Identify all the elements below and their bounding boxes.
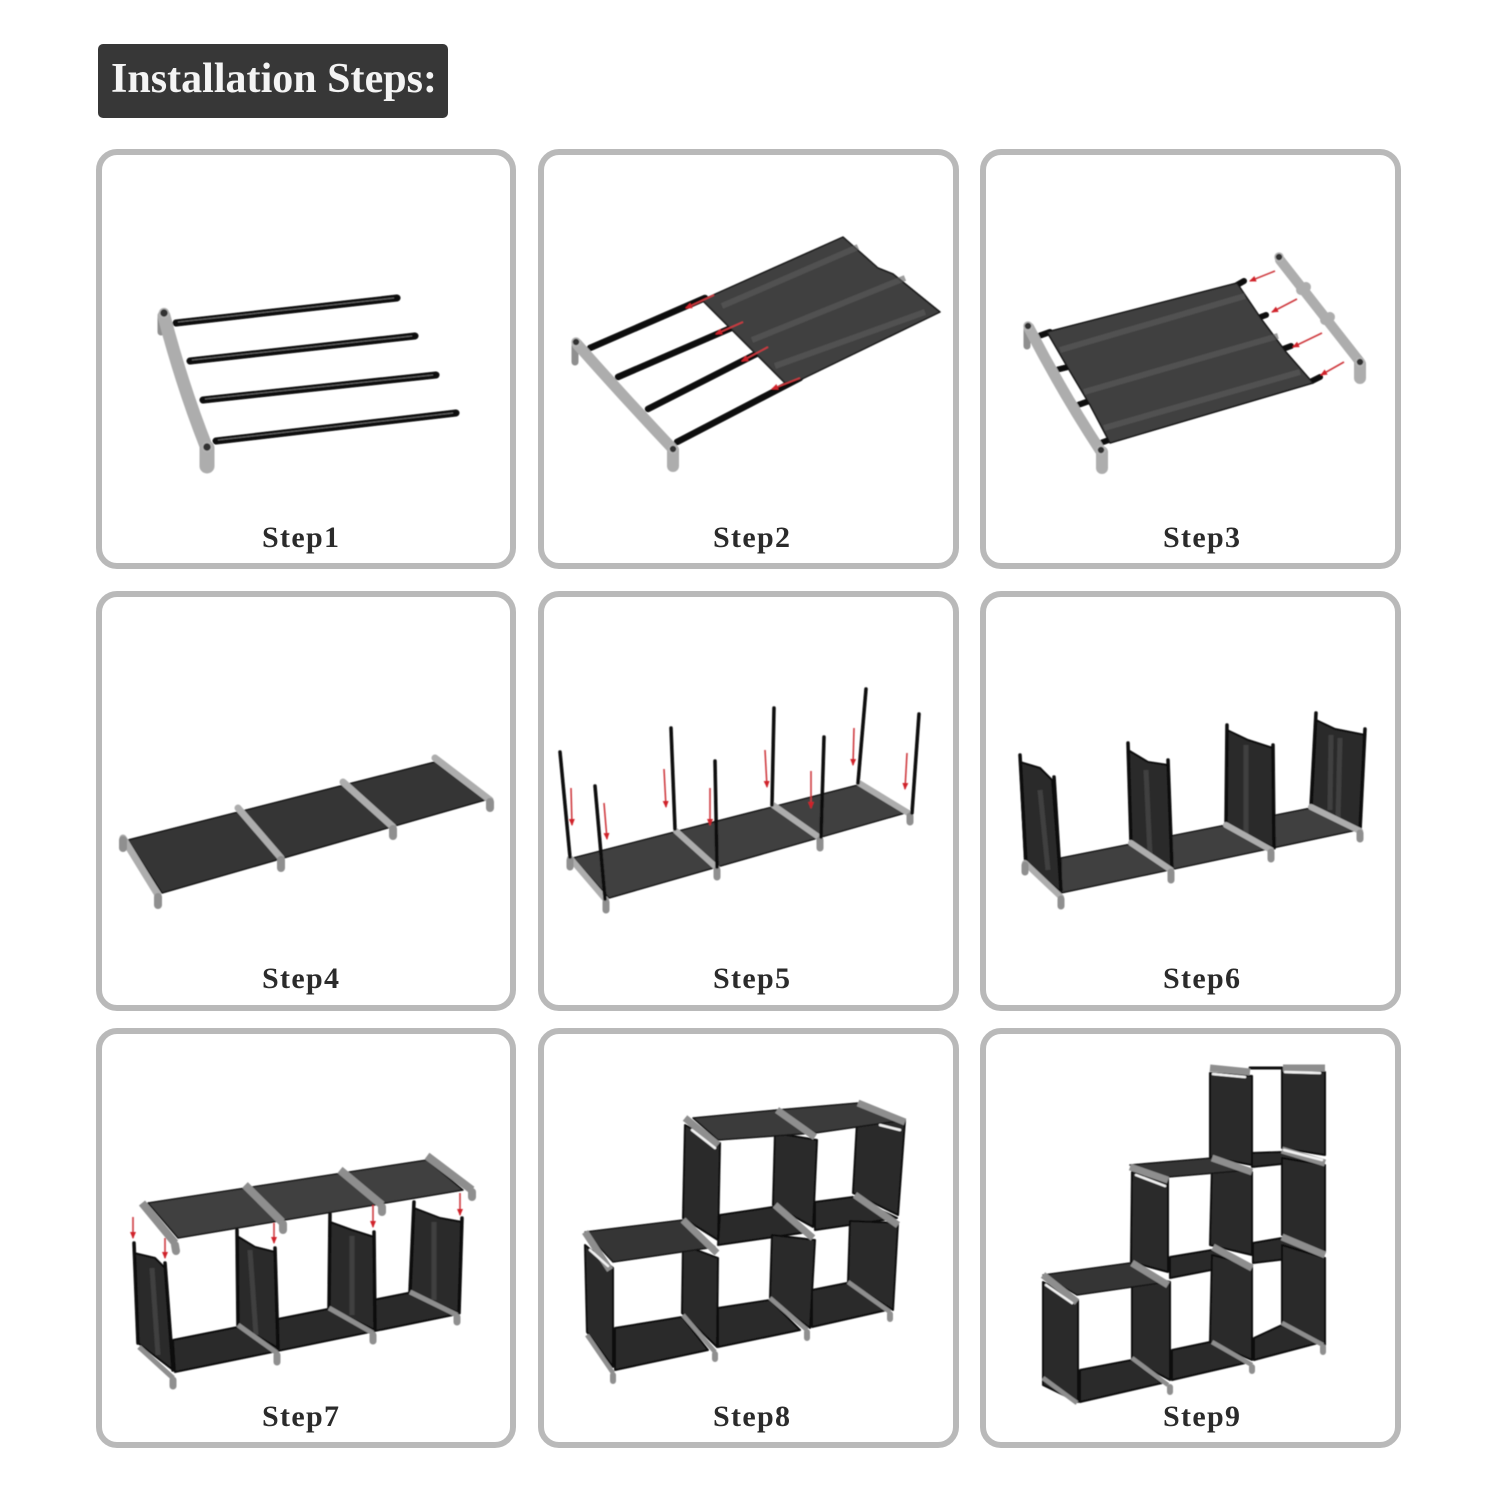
label: Step2: Step2 bbox=[713, 521, 790, 554]
panel: step 9 bbox=[983, 1031, 1398, 1445]
illustration: vertical poles inserted in base bbox=[560, 689, 919, 910]
label: Step1: Step1 bbox=[262, 521, 339, 554]
illustration: six-cube stepped shelf bbox=[585, 1103, 905, 1381]
panel: step 6 bbox=[983, 594, 1398, 1008]
title: Installation Steps bbox=[98, 44, 448, 118]
label: Step6: Step6 bbox=[1163, 962, 1240, 995]
illustration: six-cube staircase shelf bbox=[1043, 1068, 1325, 1403]
panel: step 2 bbox=[541, 152, 956, 566]
panel: step 7 bbox=[99, 1031, 513, 1445]
label: Step4: Step4 bbox=[262, 962, 339, 995]
illustration: side fabric panels fitted bbox=[1020, 713, 1365, 906]
panel: step 8 bbox=[541, 1031, 956, 1445]
panel: step 3 bbox=[983, 152, 1398, 566]
illustration: top shelf being lowered on panels bbox=[133, 1156, 472, 1386]
illustration: fabric sliding on rods bbox=[572, 237, 940, 466]
illustration: fabric on rods with second bar bbox=[1024, 253, 1364, 468]
label: Step5: Step5 bbox=[713, 962, 790, 995]
label: Step3: Step3 bbox=[1163, 521, 1240, 554]
label: Step8: Step8 bbox=[713, 1400, 790, 1433]
arrows: red join direction bbox=[1250, 271, 1344, 375]
illustration: frame bar with four rods bbox=[160, 298, 456, 466]
panel: step 1 bbox=[99, 152, 513, 566]
label: Step7: Step7 bbox=[262, 1400, 339, 1433]
arrows: red lowering direction bbox=[133, 1193, 460, 1258]
illustration: three connected shelf sections bbox=[123, 758, 490, 905]
label: Step9: Step9 bbox=[1163, 1400, 1240, 1433]
arrows: red slide direction bbox=[686, 295, 800, 389]
panel: step 5 bbox=[541, 594, 956, 1008]
arrows: red insert direction bbox=[571, 728, 907, 839]
title: Installation Steps: Installation Steps: bbox=[111, 56, 437, 102]
panel: step 4 bbox=[99, 594, 513, 1008]
